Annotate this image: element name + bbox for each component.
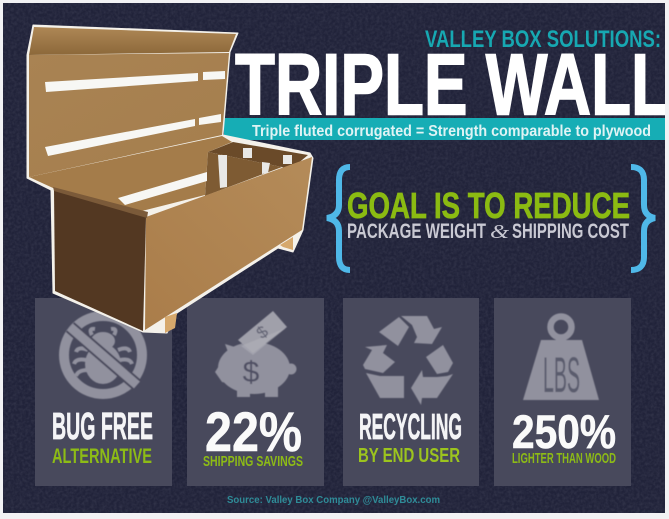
box interior back wall (29, 136, 232, 214)
heading: bug free: BUG FREE (52, 406, 153, 448)
right brace (631, 167, 655, 270)
foam posts (218, 148, 292, 188)
box long side (145, 157, 312, 330)
wooden foot back (280, 237, 293, 250)
panel: bug free (35, 298, 172, 486)
panel: recycling (343, 298, 479, 486)
box white outline (27, 25, 313, 333)
teal band (224, 118, 665, 140)
left brace (327, 167, 350, 270)
lid flap (29, 27, 236, 55)
icon: piggy bank: $ (243, 356, 260, 389)
goal subheading: PACKAGE WEIGHT (347, 220, 486, 243)
panel: recycling: RECYCLING (359, 406, 462, 447)
panel: shipping savings (187, 298, 324, 486)
source line: Source: Valley Box Company @ValleyBox.com (227, 495, 440, 506)
icon: recycling arrows (363, 316, 453, 405)
wooden foot front (165, 313, 177, 333)
icon: piggy bank: $ (253, 322, 272, 343)
box interior right compartment (208, 142, 308, 170)
cardboard box photo (27, 25, 313, 333)
label: shipping savings: SHIPPING SAVINGS (203, 453, 303, 470)
icon: piggy bank (215, 311, 296, 397)
divider (205, 152, 282, 196)
label: by end user: BY END USER (358, 445, 460, 467)
icon: no bugs (64, 316, 142, 394)
stat: 22%: 22% (205, 400, 302, 463)
icon: weight (523, 316, 599, 403)
title block (224, 26, 669, 140)
goal callout (327, 167, 655, 270)
panel: lighter than wood (494, 298, 631, 486)
box top edge (53, 187, 148, 218)
icon: weight: LBS (543, 347, 580, 403)
foam strip in box (118, 172, 207, 205)
ampersand: & (490, 221, 510, 243)
foam strips on lid (45, 71, 225, 156)
stat: 250%: 250% (512, 405, 616, 458)
label: lighter than wood: LIGHTER THAN WOOD (512, 451, 616, 467)
lid panel (29, 53, 229, 177)
box short dark end (54, 190, 146, 331)
label: alternative: ALTERNATIVE (52, 445, 152, 468)
